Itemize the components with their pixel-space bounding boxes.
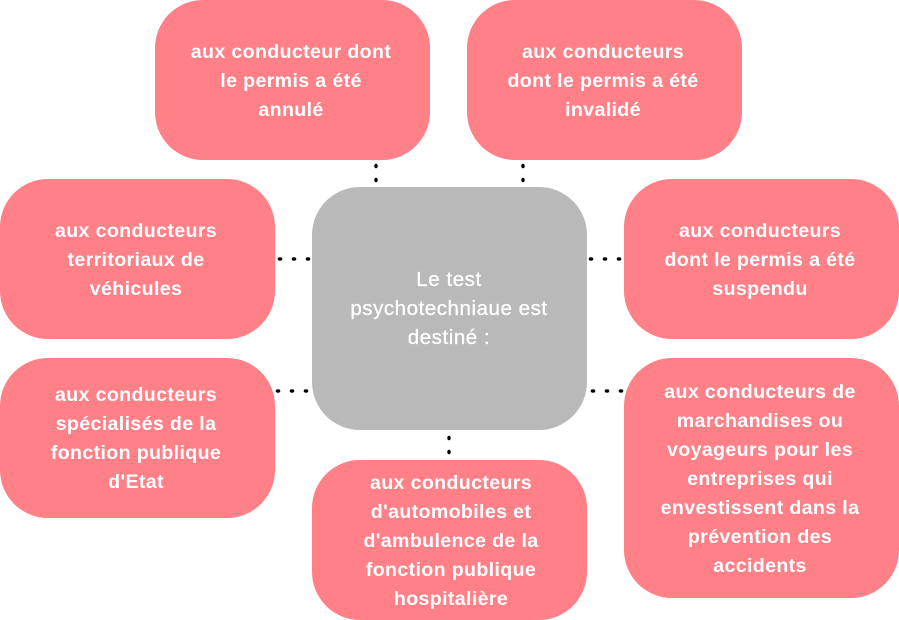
panel: centre: psychotechniaue est <box>350 297 548 320</box>
panel: conducteur permis annulé: annulé <box>258 99 324 121</box>
panel: conducteur permis annulé: le permis a été <box>220 70 362 92</box>
panel: conducteurs marchandises et voyageurs: accidents <box>713 555 807 577</box>
panel: conducteurs permis invalidé: aux conducteurs <box>522 41 684 63</box>
panel: conducteurs permis invalidé <box>467 0 742 160</box>
panel: conducteurs fonction publique hospitalière: hospitalière <box>394 588 508 610</box>
panel: conducteurs territoriaux <box>0 179 275 339</box>
panel: conducteurs fonction publique hospitalière: fonction publique <box>366 559 536 581</box>
panel: conducteurs permis suspendu: suspendu <box>712 278 808 300</box>
panel: conducteurs fonction publique d'Etat: spécialisés de la <box>56 413 217 435</box>
panel: conducteur permis annulé <box>155 0 430 160</box>
panel: conducteurs marchandises et voyageurs: marchandises ou <box>677 410 843 432</box>
panel: centre: destiné : <box>408 326 490 349</box>
panel: conducteurs fonction publique d'Etat: fonction publique <box>51 442 221 464</box>
panel: conducteurs fonction publique hospitalière: aux conducteurs <box>370 472 532 494</box>
panel: conducteurs marchandises et voyageurs: entreprises qui <box>687 468 833 490</box>
panel: conducteurs marchandises et voyageurs: aux conducteurs de <box>664 381 856 403</box>
panel: conducteurs permis suspendu: aux conducteurs <box>679 220 841 242</box>
panel: conducteurs territoriaux: territoriaux de <box>67 249 205 271</box>
panel: centre: Le test <box>416 268 482 291</box>
panel: centre <box>312 187 587 430</box>
panel: conducteurs marchandises et voyageurs: envestissent dans la <box>661 497 860 519</box>
panel: conducteurs fonction publique d'Etat: aux conducteurs <box>55 384 217 406</box>
panel: conducteurs marchandises et voyageurs: prévention des <box>688 526 832 548</box>
panel: conducteurs permis suspendu: dont le permis a été <box>664 249 856 271</box>
panel: conducteurs permis suspendu <box>624 179 899 339</box>
panel: conducteurs permis invalidé: dont le permis a été <box>507 70 699 92</box>
panel: conducteurs territoriaux: véhicules <box>90 278 182 300</box>
panel: conducteurs permis invalidé: invalidé <box>565 99 641 121</box>
panel: conducteurs fonction publique hospitalière: d'automobiles et <box>371 501 531 523</box>
panel: conducteurs territoriaux: aux conducteurs <box>55 220 217 242</box>
panel: conducteur permis annulé: aux conducteur dont <box>191 41 391 63</box>
panel: conducteurs fonction publique d'Etat: d'Etat <box>108 471 164 493</box>
panel: conducteurs fonction publique d'Etat <box>0 358 275 518</box>
panel: conducteurs marchandises et voyageurs: voyageurs pour les <box>667 439 853 461</box>
panel: conducteurs fonction publique hospitalière <box>312 460 587 620</box>
panel: conducteurs fonction publique hospitalière: d'ambulence de la <box>363 530 539 552</box>
panel: conducteurs marchandises et voyageurs <box>624 358 899 598</box>
connectors: dotted lines <box>276 164 623 454</box>
